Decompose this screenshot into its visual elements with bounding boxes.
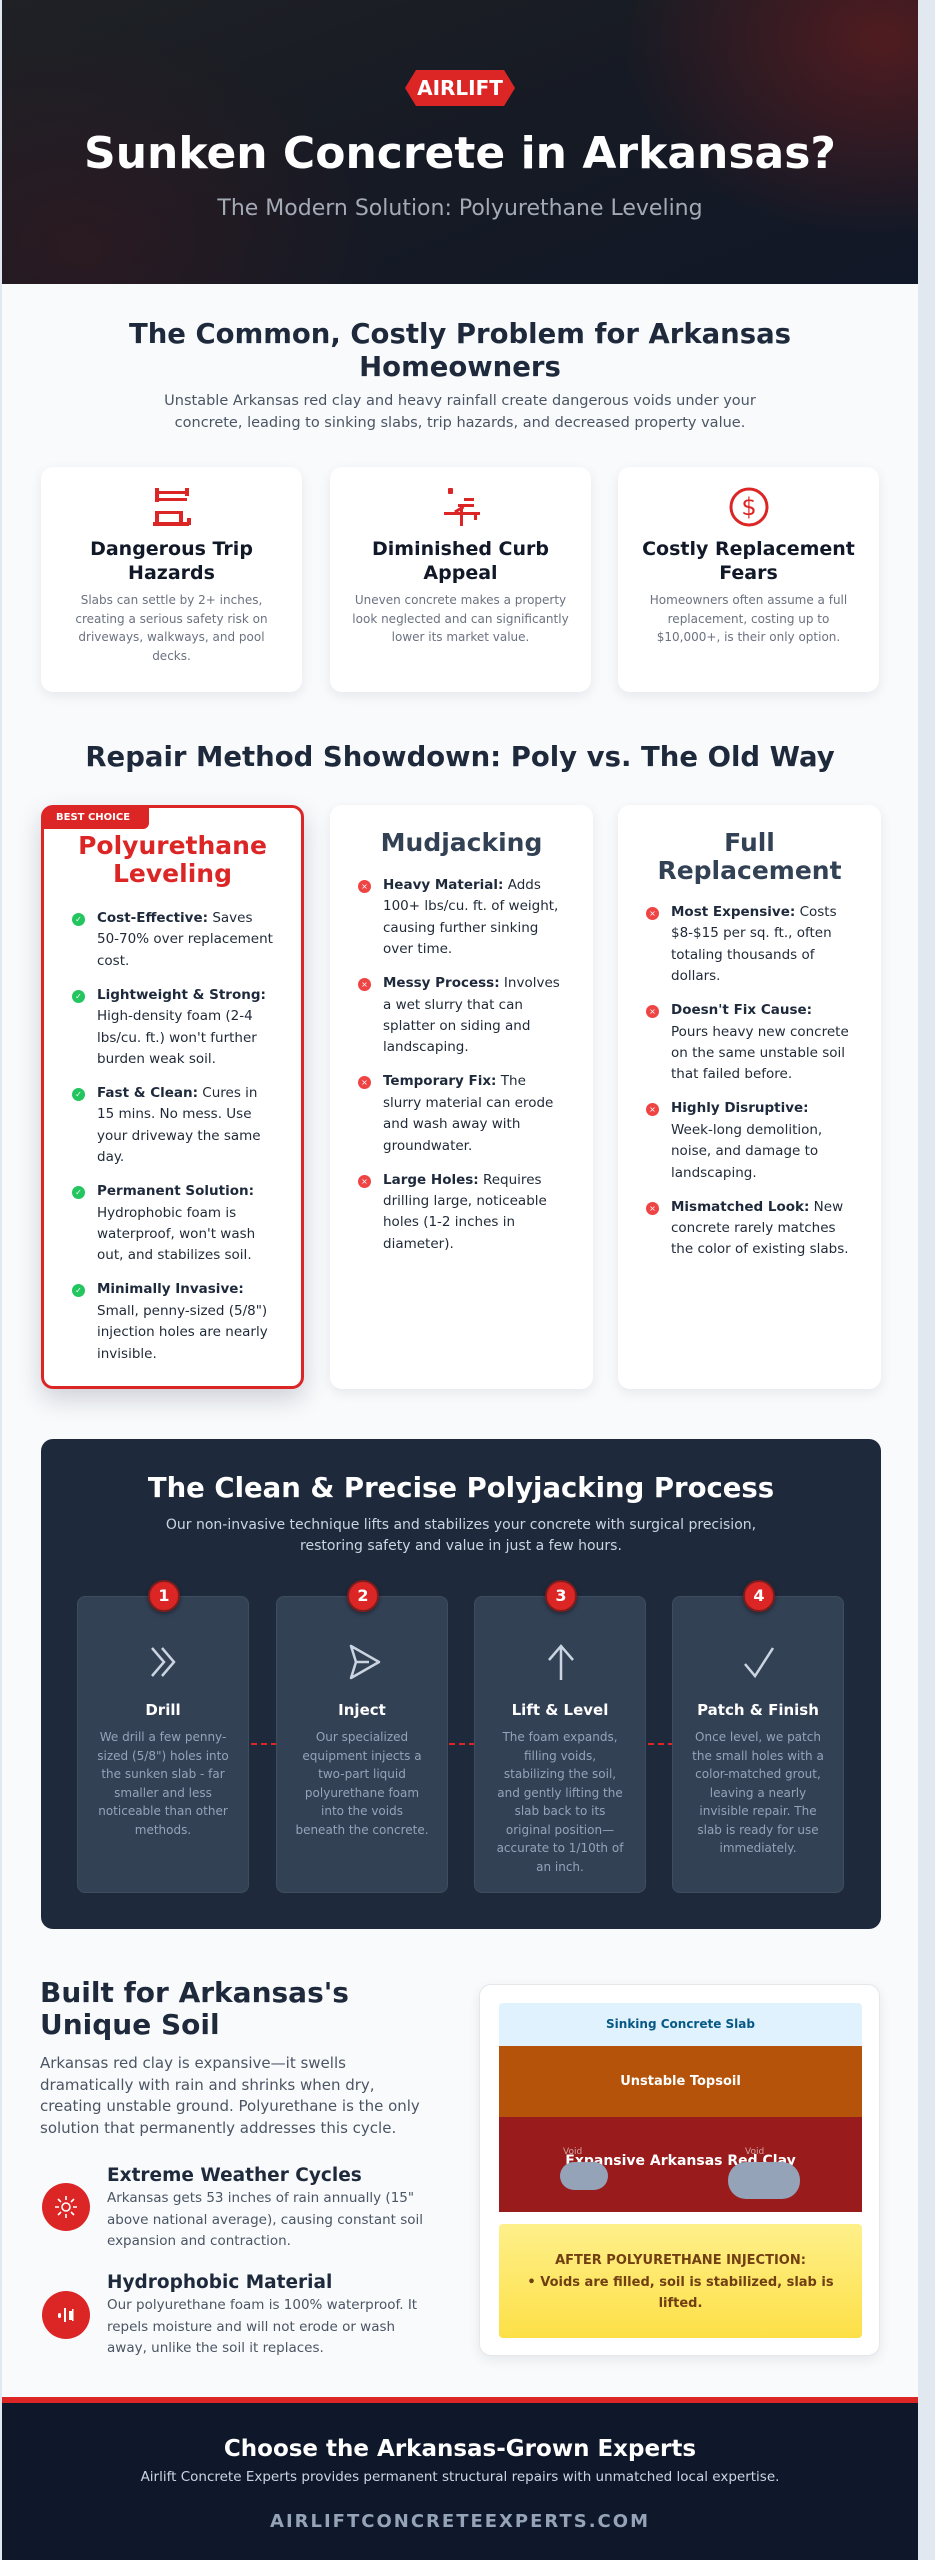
list: benefits: Cost-Effective: Saves 50-70% over replacement cost.: [97, 910, 273, 969]
feature: weather: [42, 2165, 423, 2249]
title: Diminished Curb Appeal: [372, 538, 549, 584]
text: 2: [357, 1586, 369, 1605]
title: [657, 828, 842, 885]
soil text: Arkansas red clay is expansive—it swells dramatically with rain and shrinks when dry, creating unstable ground. Polyurethane is the only solution that permanently addresses this cycle.: [40, 2054, 420, 2136]
subtitle: The Modern Solution: Polyurethane Leveling: [217, 196, 703, 221]
list: drawbacks: Large Holes: Requires drilling large, noticeable holes (1-2 inches in diameter).: [383, 1172, 547, 1252]
icon: check: [744, 1648, 774, 1678]
layer: clay with voids: Void: [745, 2147, 764, 2157]
title: Mudjacking: [381, 828, 542, 857]
list: drawbacks: Mismatched Look: New concrete rarely matches the color of existing slabs.: [671, 1199, 849, 1257]
step 2: inject: [276, 1596, 448, 1893]
header: [2, 0, 918, 284]
panel: polyurethane: ✓: [75, 1286, 82, 1295]
step 4: patch: Once level, we patch the small holes with a color-matched grout, leaving a nearly invisible repair. The slab is ready for use immediately.: [692, 1730, 824, 1855]
list: benefits: Fast & Clean: Cures in 15 mins. No mess. Use your driveway the same day.: [97, 1085, 261, 1165]
list: drawbacks: Doesn't Fix Cause: Pours heavy new concrete on the same unstable soil that failed before.: [671, 1002, 849, 1082]
panel: full replacement: ×: [649, 909, 656, 918]
icon: water: [42, 2291, 90, 2339]
panel: polyurethane: ✓: [75, 915, 82, 924]
step 2: inject: Inject: [338, 1701, 386, 1719]
icon: chevrons: [151, 1647, 176, 1677]
list: drawbacks: Heavy Material: Adds 100+ lbs/cu. ft. of weight, causing further sinking over time.: [383, 877, 558, 957]
title: Costly Replacement Fears: [642, 538, 855, 584]
step 3: lift: [474, 1596, 646, 1893]
panel: mudjacking: ×: [361, 882, 368, 891]
step 1: drill: We drill a few penny-sized (5/8") holes into the sunken slab - far smaller and less noticeable than other methods.: [97, 1730, 229, 1836]
card: replacement fears: [618, 467, 879, 692]
panel: full replacement: ×: [649, 1105, 656, 1114]
footer title: Choose the Arkansas-Grown Experts: [224, 2436, 696, 2462]
title: Extreme Weather Cycles: [107, 2165, 362, 2186]
panel: process: [41, 1439, 881, 1929]
card: curb appeal: [330, 467, 591, 692]
title: Replacement: [657, 856, 842, 885]
icon: trip hazard: [153, 488, 191, 526]
panel: mudjacking: ×: [361, 980, 368, 989]
step 1: drill: Drill: [145, 1701, 181, 1719]
layer: topsoil: [499, 2046, 862, 2117]
problem intro text: Unstable Arkansas red clay and heavy rainfall create dangerous voids under your concrete, leading to sinking slabs, trip hazards, and decreased property value.: [164, 393, 756, 431]
heading: showdown: Repair Method Showdown: Poly vs. The Old Way: [85, 741, 835, 773]
panel: full replacement: [618, 805, 881, 1389]
list: drawbacks: Highly Disruptive: Week-long demolition, noise, and damage to landscaping.: [671, 1100, 822, 1181]
list: drawbacks: Most Expensive: Costs $8-$15 per sq. ft., often totaling thousands of dollars.: [671, 904, 837, 984]
panel: mudjacking: [330, 805, 593, 1389]
list: benefits: Lightweight & Strong: High-density foam (2-4 lbs/cu. ft.) won't further burden weak soil.: [97, 987, 266, 1067]
icon: up arrow: [548, 1644, 574, 1680]
layer: slab: [499, 2003, 862, 2046]
heading: The Clean & Precise Polyjacking Process: [148, 1472, 774, 1504]
list: benefits: Permanent Solution: Hydrophobic foam is waterproof, won't wash out, and stabilizes soil.: [97, 1183, 255, 1263]
text: 1: [158, 1586, 170, 1605]
icon: dollar: $: [741, 493, 757, 521]
text: Arkansas gets 53 inches of rain annually (15" above national average), causing constant soil expansion and contraction.: [107, 2190, 423, 2249]
feature: hydrophobic: [42, 2272, 417, 2356]
icon: dollar: [730, 488, 768, 526]
desc: Uneven concrete makes a property look neglected and can significantly lower its market value.: [352, 593, 569, 644]
logo badge: [405, 70, 515, 106]
badge: best choice: [43, 807, 149, 829]
icon: sun: [42, 2183, 90, 2231]
layer: clay with voids: [499, 2117, 862, 2212]
title: Hydrophobic Material: [107, 2272, 332, 2293]
panel: polyurethane: ✓: [75, 1090, 82, 1099]
layer: slab: Sinking Concrete Slab: [606, 2017, 755, 2031]
layer: topsoil: Unstable Topsoil: [620, 2074, 741, 2089]
footer text: Airlift Concrete Experts provides permanent structural repairs with unmatched local expertise.: [141, 2469, 779, 2485]
layer: clay with voids: Void: [563, 2147, 582, 2157]
footer url: AIRLIFTCONCRETEEXPERTS.COM: [270, 2511, 650, 2532]
panel: mudjacking: ×: [361, 1078, 368, 1087]
panel: full replacement: ×: [649, 1204, 656, 1213]
list: drawbacks: Temporary Fix: The slurry material can erode and wash away with groundwater.: [383, 1073, 553, 1154]
panel: full replacement: ×: [649, 1007, 656, 1016]
heading: problem: The Common, Costly Problem for Arkansas Homeowners: [129, 318, 791, 383]
logo badge: AIRLIFT: [417, 76, 503, 100]
dashed connectors: [251, 1743, 277, 1745]
list: benefits: [72, 910, 273, 1362]
step 3: lift: The foam expands, filling voids, stabilizing the soil, and gently lifting the slab back to its original position—accurate to 1/10th of an inch.: [497, 1730, 623, 1874]
panel: polyurethane: [41, 805, 304, 1389]
list: drawbacks: [358, 877, 560, 1252]
icon: curb appeal: [444, 488, 480, 526]
title: Dangerous Trip Hazards: [90, 538, 253, 584]
footer: [2, 2397, 918, 2560]
desc: Slabs can settle by 2+ inches, creating a serious safety risk on driveways, walkways, and pool decks.: [75, 593, 268, 663]
panel: polyurethane: ✓: [75, 992, 82, 1001]
step 3: lift: Lift & Level: [512, 1701, 608, 1719]
callout: after injection: • Voids are filled, soil is stabilized, slab is lifted.: [527, 2274, 834, 2311]
text: 3: [555, 1586, 567, 1605]
title: Full: [724, 828, 775, 857]
text: 4: [753, 1586, 765, 1605]
list: benefits: Minimally Invasive: Small, penny-sized (5/8") injection holes are nearly invisible.: [97, 1281, 268, 1362]
intro: Our non-invasive technique lifts and stabilizes your concrete with surgical precision, restoring safety and value in just a few hours.: [166, 1517, 756, 1554]
card: trip hazards: [41, 467, 302, 692]
panel: polyurethane: ✓: [75, 1188, 82, 1197]
step 1: drill: [77, 1596, 249, 1893]
badge: best choice: BEST CHOICE: [56, 812, 130, 823]
title: Polyurethane Leveling: [78, 831, 267, 888]
heading: soil: Built for Arkansas's Unique Soil: [40, 1976, 349, 2041]
callout: after injection: AFTER POLYURETHANE INJECTION:: [555, 2253, 806, 2268]
step 4: patch: [672, 1596, 844, 1893]
desc: Homeowners often assume a full replacement, costing up to $10,000+, is their only option.: [650, 593, 847, 644]
layer: clay with voids: Expansive Arkansas Red Clay: [565, 2153, 796, 2169]
icon: send: [350, 1644, 380, 1680]
step 4: patch: Patch & Finish: [697, 1701, 819, 1719]
text: Our polyurethane foam is 100% waterproof. It repels moisture and will not erode or wash away, unlike the soil it replaces.: [107, 2297, 417, 2356]
panel: mudjacking: ×: [361, 1177, 368, 1186]
callout: after injection: [499, 2224, 862, 2338]
title: Sunken Concrete in Arkansas?: [84, 128, 836, 179]
step 2: inject: Our specialized equipment injects a two-part liquid polyurethane foam into the voids beneath the concrete.: [295, 1730, 429, 1836]
list: drawbacks: Messy Process: Involves a wet slurry that can splatter on siding and landscaping.: [383, 975, 560, 1055]
list: drawbacks: [646, 904, 849, 1257]
diagram: soil layers: [479, 1984, 880, 2356]
